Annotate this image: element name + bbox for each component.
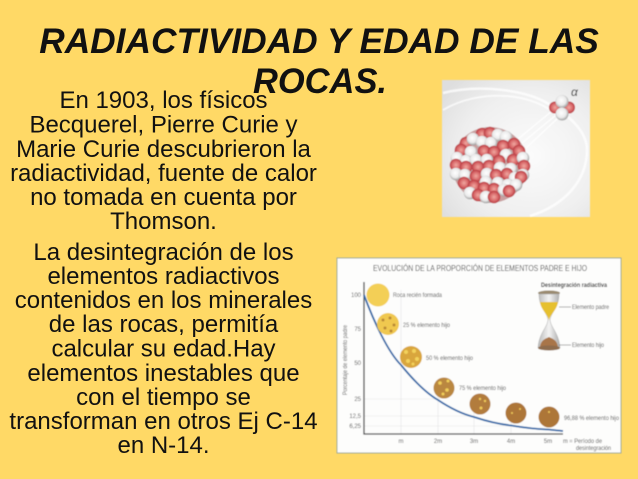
sample labels: Roca recién formada [393,292,442,299]
x axis labels: 5m [544,439,552,445]
title: RADIACTIVIDAD Y EDAD DE LAS [39,22,599,61]
text block: radioactive decay and rock age: calcular su edad.Hay [51,336,276,362]
x axis labels: 2m [434,439,442,445]
text block: radioactive decay and rock age: elementos inestables que [27,360,300,387]
text block: radioactive decay and rock age: transforman en otros Ej C-14 [9,408,318,435]
text block: discovery of radioactivity: Marie Curie descubrieron la [16,136,312,163]
text block: discovery of radioactivity: Thomson. [110,208,217,235]
icon: nucleus cluster [450,127,530,203]
title [39,22,599,101]
decay curve [364,295,563,431]
title: ROCAS. [253,62,387,101]
y axis labels: 100 [351,293,362,299]
y axis labels: 75 [354,327,362,333]
text block: radioactive decay and rock age [9,239,318,459]
text block: radioactive decay and rock age: elementos radiactivos [47,263,280,290]
y axis labels: 25 [354,397,362,403]
hourglass legend: Desintegración radiactiva [541,282,607,289]
rock samples [366,284,560,428]
y axis labels: 50 [354,361,362,367]
label: alpha symbol: α [571,85,579,99]
chart title: EVOLUCIÓN DE LA PROPORCIÓN DE ELEMENTOS PADRE E HIJO [373,264,587,273]
chart: evolution of parent and daughter elements [337,258,621,453]
x axis note [563,439,611,452]
x axis note: desintegración [576,446,611,452]
text block: radioactive decay and rock age: con el tiempo se [76,384,251,411]
y axis labels: 12,5 [349,414,362,420]
y axis title: Porcentaje de elemento padre [343,324,349,395]
x axis labels: 4m [507,439,515,445]
text block: radioactive decay and rock age: La desintegración de los [33,239,294,266]
image: alpha decay of a nucleus [442,80,590,217]
y axis labels [349,293,362,430]
text block: discovery of radioactivity: Becquerel, Pierre Curie y [29,112,298,138]
sample labels: 96,88 % elemento hijo [564,415,619,422]
sample labels: 25 % elemento hijo [403,322,450,329]
icon: alpha particle [549,95,575,120]
text block: discovery of radioactivity: no tomada en cuenta por [30,184,297,211]
x axis labels [398,439,552,445]
hourglass legend: Elemento padre [572,304,609,311]
sample labels [393,292,619,422]
axes [364,282,563,434]
text block: discovery of radioactivity: radiactividad, fuente de calor [10,160,317,187]
icon: emission rays [518,111,558,148]
y axis labels: 6,25 [349,424,362,430]
hourglass legend: Elemento hijo [572,342,604,349]
x axis labels: 3m [470,439,478,445]
text block: discovery of radioactivity: En 1903, los físicos [59,87,268,114]
sample labels: 75 % elemento hijo [459,385,506,392]
sample labels: 50 % elemento hijo [426,355,473,362]
text block: radioactive decay and rock age: en N-14. [117,432,210,459]
x axis labels: m [398,439,404,445]
text block: radioactive decay and rock age: de las rocas, permitía [49,311,279,338]
grid lines [364,290,511,434]
x axis note: m = Período de [563,439,603,445]
text block: radioactive decay and rock age: contenidos en los minerales [15,287,312,314]
hourglass legend [538,282,609,350]
text block: discovery of radioactivity [10,87,317,235]
